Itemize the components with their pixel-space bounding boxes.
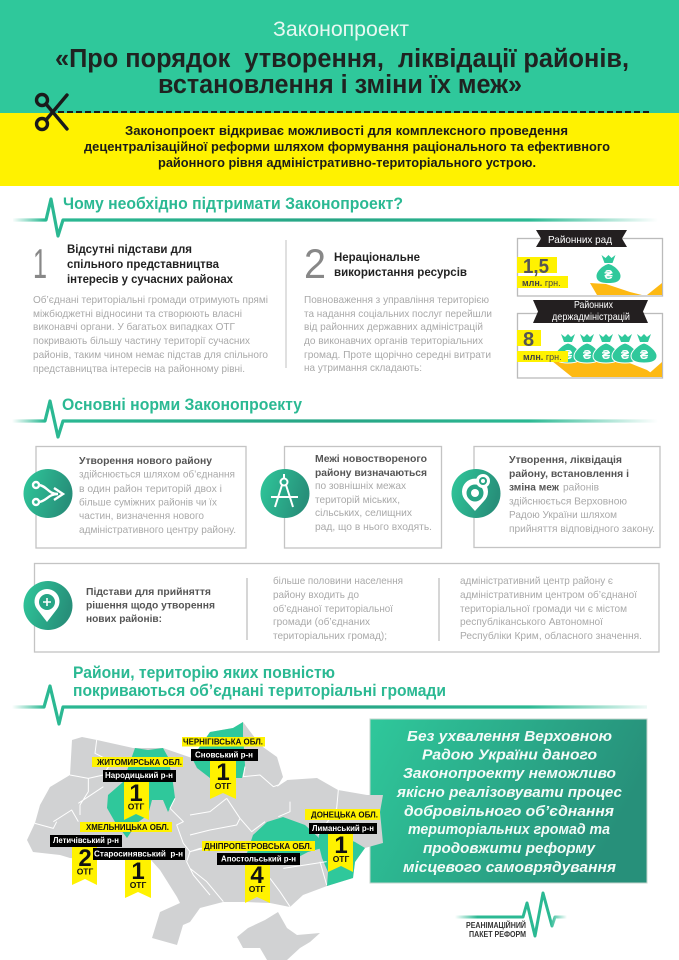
panel: district administrations cost: держадміністрацій [552,311,630,323]
label: Donetsk: 1 [334,832,348,859]
panel: new district creation: частин, визначення нового [79,510,204,522]
reason 2: Повноваження з управління територією [304,294,489,306]
label: Donetsk: ОТГ [333,854,349,864]
icon: location pin with plus [24,581,72,630]
reason 2: 2 [304,240,326,287]
label: Khmelnytskyi: Летичівський р-н [53,835,119,845]
panel: district councils cost: Районних рад [548,234,612,246]
panel: district administrations cost: млн. грн. [523,352,562,362]
icon: money bag on hand [590,255,662,295]
reason 1: спільного представництва [67,259,220,271]
panel: new district boundaries: рад, що в нього входять. [315,521,432,533]
panel: grounds for decision: нових районів: [86,613,162,625]
panel: grounds for decision: району входить до [273,589,359,601]
panel: new district boundaries: територій міських, [315,494,400,506]
icon: five money bags on hands: ₴ [602,348,611,362]
label: Chernihiv: 1 [216,759,230,786]
label: Dnipropetrovsk: ДНІПРОПЕТРОВСЬКА ОБЛ. [204,841,312,851]
section heading: districts covered: покриваються об’єднані територіальні громади [73,682,446,700]
callout: якісно реалізовувати процес [396,784,623,801]
callout: продовжити реформу [423,840,596,857]
label: Donetsk: ДОНЕЦЬКА ОБЛ. [311,810,378,820]
header band [0,0,679,113]
reason 1: 1 [33,240,47,287]
panel: grounds for decision: республіканського Автономної [460,616,603,628]
icon: merging arrows [24,469,72,518]
panel: liquidation and boundary change: району, встановлення і [509,468,629,480]
panel: new district boundaries: району визначаються [315,467,427,479]
label: Dnipropetrovsk: Апостольський р-н [221,854,296,864]
panel: grounds for decision: громади (об’єднаних [273,616,371,628]
panel: new district creation: здійснюється шляхом об’єднання [79,468,235,480]
icon: five money bags on hands [552,334,662,377]
label: Zhytomyr: ЖИТОМИРСЬКА ОБЛ. [96,757,182,767]
reason 2: від районних державних адміністрацій [304,321,483,333]
panel: district administrations cost: 8 [523,329,534,351]
region borders [35,740,210,895]
panel: grounds for decision: рішення щодо утворення [86,600,215,612]
label: Dnipropetrovsk [202,841,315,903]
label: Zhytomyr [92,757,183,820]
reason 1: представництва інтересів на районному рівні. [33,363,245,375]
reason 2: та надання соціальних послуг перейшли [304,308,492,320]
highlighted regions [107,722,365,886]
panel: grounds for decision: об’єднаної територіальної [273,603,393,615]
callout: Радою України даного [422,746,597,764]
reason 2 [304,240,492,374]
label: Zhytomyr: Народицький р-н [105,770,173,780]
callout: Без ухвалення Верховною [407,728,612,745]
icon: five money bags on hands: ₴ [583,348,592,362]
callout: місцевого самоврядування [403,859,616,876]
reason 1: міжбюджетні відносини та створюють власні [33,308,242,320]
panel: district councils cost: млн. грн. [522,278,561,288]
panel: district administrations cost [517,299,662,378]
label: Dnipropetrovsk: 4 [250,862,264,889]
icon: five money bags on hands: ₴ [564,348,573,362]
logo: РЕАНІМАЦІЙНИЙ [466,921,526,930]
icon: gears in pin [452,469,500,518]
reason 1: районів, таким чином немає підстав для спільного [33,349,268,361]
reason 2: на утримання складають: [304,362,422,374]
icon: scissors with cut line [36,94,652,130]
panel: new district boundaries: сільських, селищних [315,507,413,519]
callout [370,719,647,883]
title: Законопроект [273,18,409,41]
reason 1: Відсутні підстави для [67,244,192,256]
label: Zhytomyr: ОТГ [128,802,144,812]
section heading: main provisions [12,396,665,437]
panel: grounds for decision: більше половини населення [273,575,403,587]
panel: liquidation and boundary change: районів [563,482,599,494]
section heading: why support [13,195,658,236]
reason 2: громад. Проте щорічно середні витрати [304,349,491,361]
panel: new district creation [24,446,246,548]
section heading: main provisions: Основні норми Законопроекту [62,396,303,414]
label: Khmelnytskyi: 1 [131,858,145,885]
logo: ПАКЕТ РЕФОРМ [469,930,526,939]
label: Khmelnytskyi: 2 [78,845,92,872]
label: Chernihiv: Сновський р-н [195,750,253,760]
label: Khmelnytskyi: ОТГ [130,880,146,890]
reason 1 [33,240,268,375]
panel: liquidation and boundary change [452,446,660,548]
panel: liquidation and boundary change: Утворення, ліквідація [509,454,622,466]
panel: grounds for decision: територіальної громади чи є містом [460,603,627,615]
panel: grounds for decision [24,564,659,652]
label: Khmelnytskyi [50,822,185,898]
callout: територіальних громад та [408,821,610,838]
panel: district administrations cost: Районних [574,299,614,311]
callout: добровільного об’єднання [404,803,614,820]
intro text: децентралізаційної реформи шляхом формування раціонального та ефективного [84,140,610,154]
panel: liquidation and boundary change: Радою України шляхом [509,509,617,521]
title: встановлення і зміни їх меж» [158,71,522,99]
section heading: districts covered [12,664,647,724]
title: «Про порядок утворення, ліквідації районів, [55,45,629,73]
panel: new district creation: адміністративного центру району. [79,524,236,536]
panel: new district boundaries [260,446,442,548]
label: Chernihiv: ЧЕРНІГІВСЬКА ОБЛ. [183,736,263,746]
panel: grounds for decision: адміністративний центр району є [460,575,614,587]
label: Zhytomyr: 1 [129,780,143,807]
logo [455,893,567,939]
reason 2: використання ресурсів [334,267,467,279]
panel: grounds for decision: Республіки Крим, обласного значення. [460,630,642,642]
panel: liquidation and boundary change: зміна меж [509,482,560,494]
intro text: Законопроект відкриває можливості для комплексного проведення [125,124,568,138]
icon: compass [260,469,310,518]
reason 1: покривають більшу частину території сучасних [33,335,251,347]
reason 2: до виконавчих органів територіальних [304,335,484,347]
panel: grounds for decision: Підстави для прийняття [86,586,211,598]
label: Khmelnytskyi: ОТГ [77,866,93,876]
label: Donetsk: Лиманський р-н [312,823,374,833]
panel: new district boundaries: Межі новоствореного [315,453,427,465]
reason 1: Об’єднані територіальні громади отримують прямі [33,294,268,306]
icon: money bag on hand: ₴ [604,268,613,282]
label: Chernihiv: ОТГ [215,781,231,791]
panel: liquidation and boundary change: здійснюється Верховною [509,496,627,508]
icon: five money bags on hands: ₴ [640,348,649,362]
map of Ukraine [27,722,383,960]
callout: Законопроекту неможливо [403,765,616,782]
section heading: districts covered: Райони, територію яких повністю [73,664,335,682]
section heading: why support: Чому необхідно підтримати Законопроект? [63,195,403,213]
panel: new district boundaries: по зовнішніх межах [315,480,407,492]
Crimea [237,912,320,960]
intro text: районного рівня адміністративно-територіального устрою. [158,156,536,170]
label: Khmelnytskyi: Старосинявський р-н [94,848,183,858]
panel: grounds for decision: територіальних громад); [273,630,387,642]
panel: liquidation and boundary change: прийняття відповідного закону. [509,523,655,535]
label: Khmelnytskyi: ХМЕЛЬНИЦЬКА ОБЛ. [86,822,169,832]
label: Dnipropetrovsk: ОТГ [249,884,265,894]
label: Chernihiv [182,736,265,799]
panel: grounds for decision: адміністративним центром об’єднаної [460,589,637,601]
yellow intro band [0,113,679,186]
panel: new district creation: в один район територій двох і [79,483,222,495]
icon: five money bags on hands: ₴ [621,348,630,362]
reason 1: інтересів у сучасних районах [67,274,234,286]
title [55,18,629,99]
reason 1: виконавчі органи. У багатьох випадках ОТГ [33,321,235,333]
reason 2: Нераціональне [334,252,420,264]
panel: district councils cost [517,230,662,296]
panel: new district creation: більше суміжних районів чи їх [79,496,218,508]
panel: district councils cost: 1,5 [523,256,549,278]
intro text [84,124,610,170]
panel: new district creation: Утворення нового району [79,455,212,467]
label: Donetsk [305,809,380,872]
